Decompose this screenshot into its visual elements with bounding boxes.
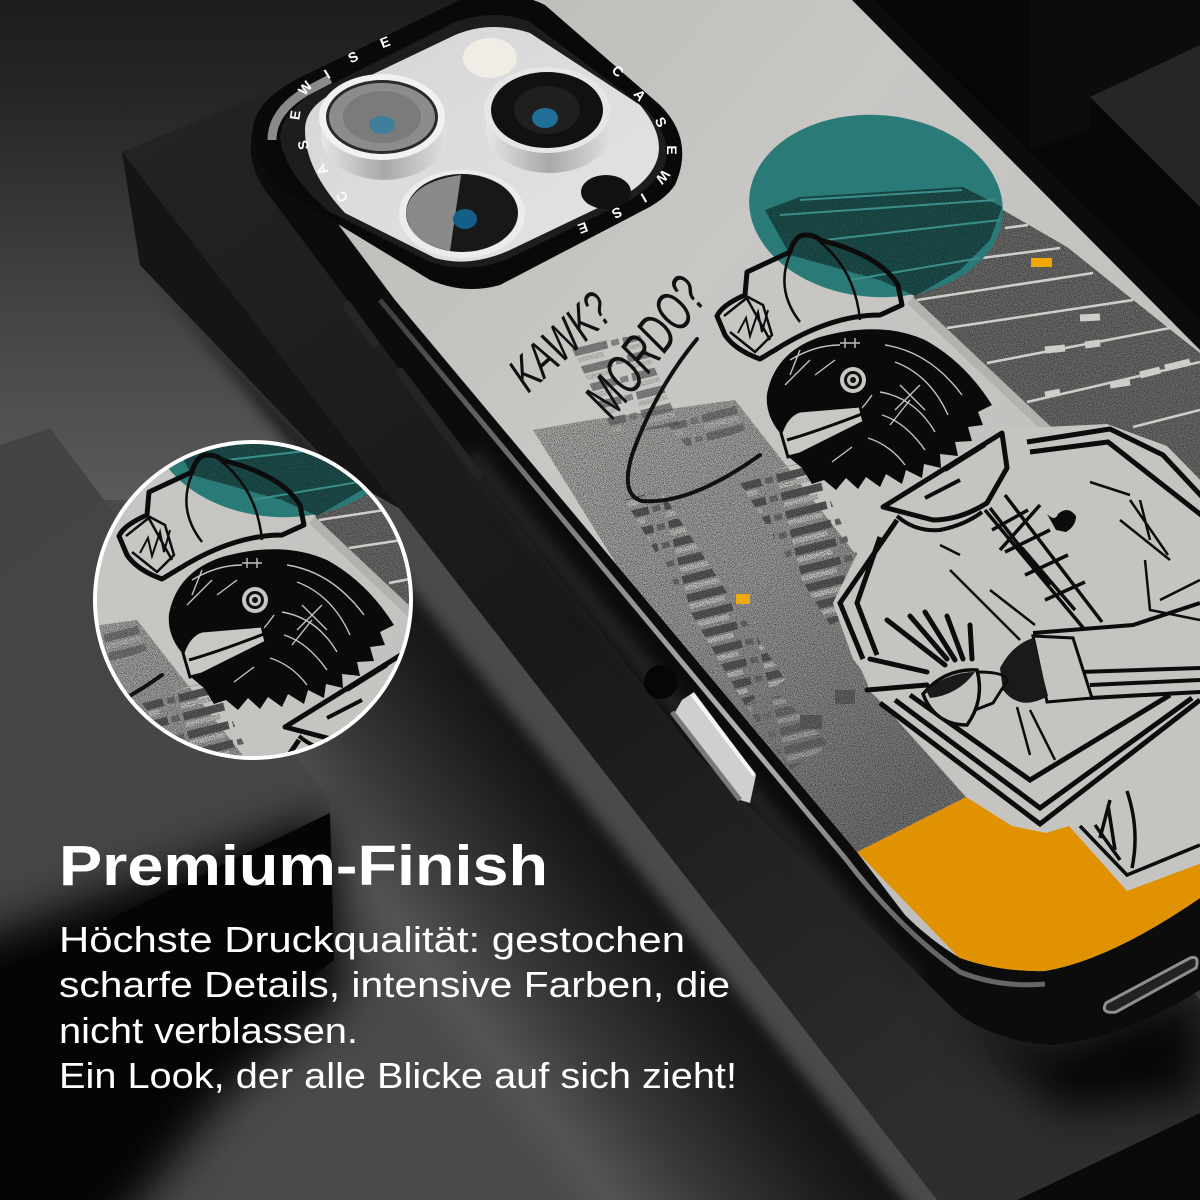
right tower windows xyxy=(1045,317,1190,395)
body text: Höchste Druckqualität: gestochen xyxy=(59,919,685,960)
orange window left xyxy=(736,594,750,604)
lens: right xyxy=(484,67,612,173)
teal building floors xyxy=(780,190,1000,280)
case body xyxy=(251,0,1200,1045)
cuff hatch xyxy=(1000,638,1048,703)
title: Premium-Finish xyxy=(59,834,548,898)
charging port xyxy=(1104,957,1197,1012)
brand ring text: E xyxy=(286,109,304,121)
brand ring text: A xyxy=(313,161,331,179)
lens: left xyxy=(319,74,447,180)
brand ring text: A xyxy=(631,86,649,104)
right tower xyxy=(913,210,1200,520)
placket xyxy=(985,495,1102,630)
brand ring text: S xyxy=(609,204,625,222)
left tower xyxy=(533,335,966,852)
orange window right xyxy=(1031,258,1052,267)
building in teal circle xyxy=(765,187,1002,296)
brand ring text: S xyxy=(294,139,312,151)
heart emblem xyxy=(1047,510,1076,532)
shirt shading xyxy=(940,482,1200,760)
brand ring text: E xyxy=(378,33,392,51)
pedestal sharp upper side xyxy=(122,152,420,520)
beak xyxy=(781,406,864,457)
orange block xyxy=(857,797,1200,972)
graffiti: MORDO? xyxy=(572,265,719,428)
microphone cutout xyxy=(581,175,631,209)
teal circle xyxy=(743,106,1009,306)
left foreground block xyxy=(0,428,342,1200)
pedestal side face xyxy=(150,275,937,1200)
right tower floors xyxy=(917,225,1200,427)
island glass xyxy=(305,27,659,262)
edge highlight xyxy=(380,300,1045,985)
lower garment xyxy=(1080,791,1200,875)
brand ring text: C xyxy=(333,188,351,206)
body text: nicht verblassen. xyxy=(59,1010,358,1051)
body text xyxy=(59,919,737,1096)
brand ring text: W xyxy=(295,77,316,98)
brand ring text: S xyxy=(345,48,361,66)
ray strokes xyxy=(867,612,972,690)
brand ring text: I xyxy=(638,190,650,206)
eye xyxy=(840,367,866,393)
case side gloss xyxy=(470,455,915,985)
island inner ring xyxy=(280,15,666,268)
brand ring text xyxy=(286,33,680,237)
brand ring text: I xyxy=(321,66,333,82)
flash xyxy=(463,38,517,78)
right tower light strip xyxy=(910,300,1050,432)
sleeve xyxy=(1033,603,1200,698)
body text: Ein Look, der alle Blicke auf sich zieht! xyxy=(59,1055,737,1096)
phone with case xyxy=(251,0,1200,1045)
illustration: shirt xyxy=(833,424,1200,891)
brand ring text: E xyxy=(664,145,680,155)
camera island xyxy=(253,0,682,289)
feather hatching xyxy=(785,338,962,465)
body text: scharfe Details, intensive Farben, die xyxy=(59,964,730,1005)
brand ring text: W xyxy=(652,167,673,188)
phone artwork xyxy=(320,0,1200,1000)
collar xyxy=(883,433,1007,520)
island frame xyxy=(253,0,682,289)
pedestal dark corner xyxy=(1017,1113,1200,1200)
brand ring text: E xyxy=(576,219,590,237)
brand ring text: C xyxy=(609,62,627,80)
ring grey highlight xyxy=(272,79,330,140)
side buttons xyxy=(347,305,756,803)
cup xyxy=(923,670,979,725)
lens: bottom xyxy=(399,170,525,258)
brand ring text: S xyxy=(652,114,670,130)
graffiti xyxy=(498,265,760,501)
zoom detail circle xyxy=(93,440,413,760)
phone shadow xyxy=(954,990,1200,1110)
illustration: hat xyxy=(717,235,902,359)
illustration: bird head xyxy=(767,329,992,490)
shirt outlines xyxy=(840,429,1200,824)
graffiti: KAWK? xyxy=(498,282,623,402)
